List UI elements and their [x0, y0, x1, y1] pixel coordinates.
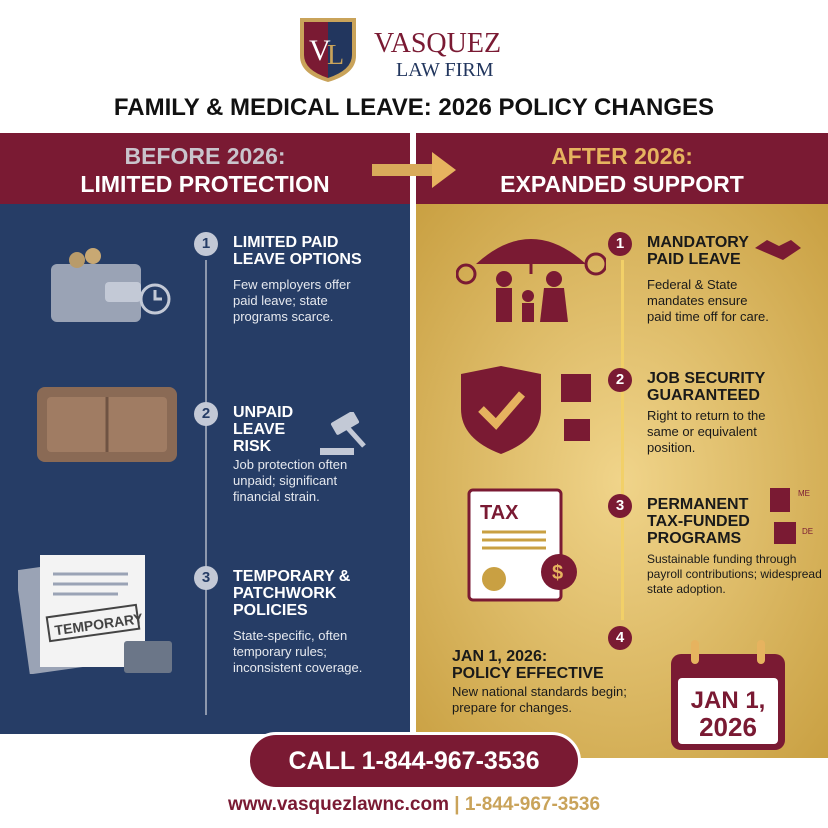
icon: tax doc: $ [552, 562, 563, 584]
item 3: 3 [202, 569, 210, 586]
icon: shield [461, 366, 591, 454]
item 3 [194, 566, 362, 675]
item 3: 3 [616, 497, 624, 514]
icon: empty wallet [37, 387, 177, 462]
item 1: 1 [616, 235, 624, 252]
item 4 [452, 626, 632, 715]
timeline line [621, 260, 624, 620]
item 4: POLICY EFFECTIVE [452, 665, 604, 682]
item 3: Sustainable funding through payroll contributions; widespread state adoption. [647, 552, 822, 596]
item 1: Few employers offer paid leave; state programs scarce. [233, 277, 351, 324]
icon: calendar: 2026 [699, 712, 757, 742]
item 1: Federal & State mandates ensure paid time off for care. [647, 277, 769, 324]
icon: calendar: JAN 1, [691, 687, 765, 714]
item 4: 4 [616, 629, 624, 646]
item 3: TAX-FUNDED [647, 513, 750, 530]
logo: LAW FIRM [396, 59, 494, 81]
website footer: www.vasquezlawnc.com | 1-844-967-3536 [228, 794, 600, 815]
icon: temporary docs: TEMPORARY [54, 610, 144, 638]
icon: handshake [755, 240, 801, 260]
item 2: Job protection often unpaid; significant financial strain. [233, 457, 347, 504]
logo: L [327, 40, 344, 71]
item 2 [194, 402, 347, 504]
item 1: MANDATORY [647, 234, 749, 251]
icon: calendar [671, 640, 785, 750]
logo: V [309, 34, 331, 67]
icon: gavel [320, 412, 366, 455]
item 4: JAN 1, 2026: [452, 648, 547, 665]
item 2: 2 [202, 405, 210, 422]
timeline line [205, 260, 207, 715]
item 2: LEAVE [233, 421, 285, 438]
title: FAMILY & MEDICAL LEAVE: 2026 POLICY CHANGES [114, 94, 714, 121]
item 1 [194, 232, 362, 324]
arrow [372, 152, 456, 188]
left header: BEFORE 2026: [124, 143, 286, 169]
item 1: PAID LEAVE [647, 251, 741, 268]
item 2: RISK [233, 438, 271, 455]
icon: tax doc [468, 488, 577, 602]
icon: temporary docs [18, 555, 172, 674]
item 3: State-specific, often temporary rules; inconsistent coverage. [233, 628, 362, 675]
item 3: PERMANENT [647, 496, 748, 513]
item 1: LEAVE OPTIONS [233, 251, 362, 268]
item 3: TEMPORARY & [233, 568, 350, 585]
left header [0, 133, 410, 204]
call button [247, 732, 581, 790]
item 1: LIMITED PAID [233, 234, 338, 251]
call button: CALL 1-844-967-3536 [288, 747, 540, 775]
item 3: PATCHWORK [233, 585, 336, 602]
item 2: 2 [616, 371, 624, 388]
icon: tax doc: TAX [480, 502, 519, 524]
item 2: UNPAID [233, 404, 293, 421]
item 2 [608, 368, 766, 455]
logo [300, 18, 501, 82]
item 2: Right to return to the same or equivalent position. [647, 408, 766, 455]
item 2: JOB SECURITY [647, 370, 765, 387]
item 3: POLICIES [233, 602, 308, 619]
item 3: ME [798, 489, 810, 498]
right header: EXPANDED SUPPORT [500, 171, 744, 197]
item 3 [608, 488, 822, 596]
right header [416, 133, 828, 204]
left header: LIMITED PROTECTION [80, 171, 330, 197]
panel: after [416, 204, 828, 758]
right header: AFTER 2026: [551, 143, 693, 169]
item 2: GUARANTEED [647, 387, 760, 404]
item 3: DE [802, 527, 813, 536]
panel: before [0, 204, 410, 734]
item 3: PROGRAMS [647, 530, 741, 547]
icon: family umbrella [456, 239, 606, 322]
item 4: New national standards begin; prepare for changes. [452, 684, 627, 715]
item 1: 1 [202, 235, 210, 252]
logo: VASQUEZ [374, 28, 501, 59]
item 1 [608, 232, 801, 324]
icon: wallet [51, 248, 170, 322]
